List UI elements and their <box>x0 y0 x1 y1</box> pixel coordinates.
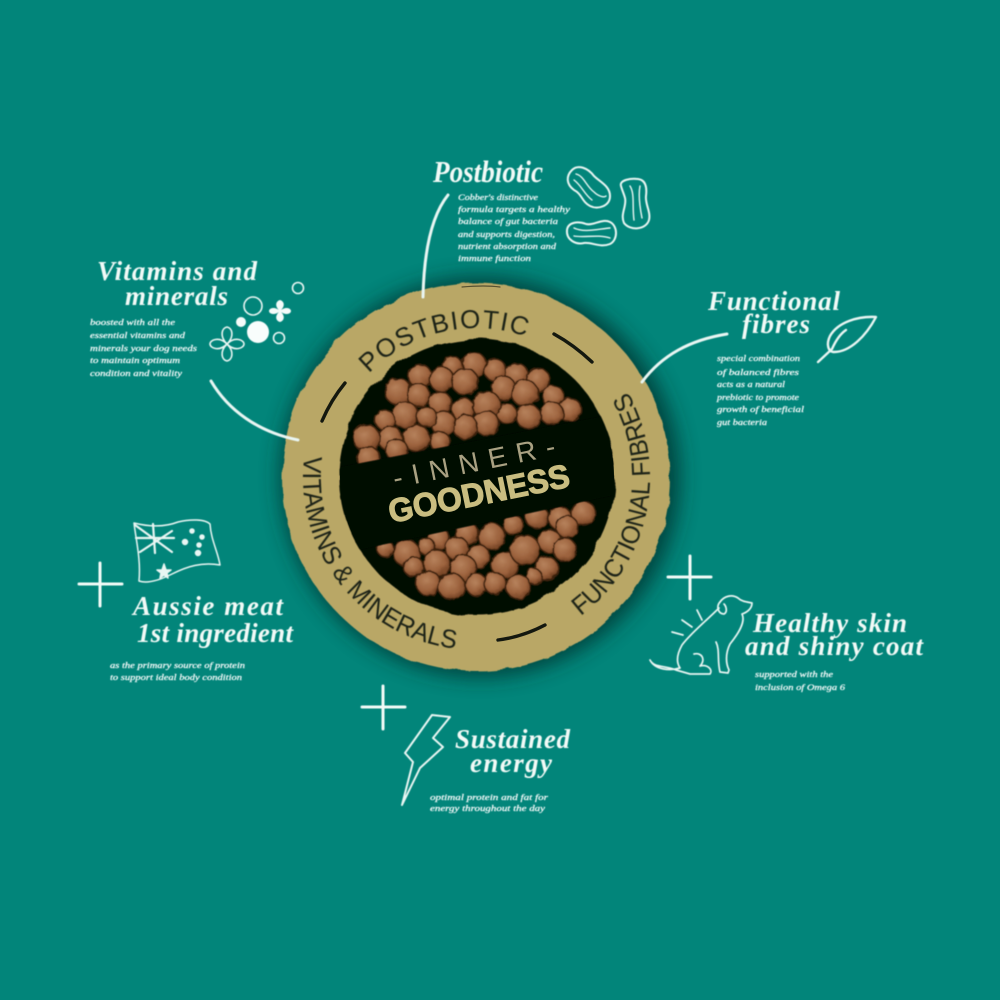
text: fibres description <box>716 354 805 427</box>
ring label: postbiotic: POSTBIOTIC <box>358 309 530 372</box>
heading: healthy skin and shiny coat <box>745 608 924 661</box>
text: skin description: inclusion of Omega 6 <box>755 683 845 692</box>
ring dashes <box>322 286 592 640</box>
text: postbiotic description: formula targets a healthy <box>458 205 571 214</box>
heading: aussie meat <box>131 591 294 648</box>
banner text: inner: -INNER- <box>390 431 558 494</box>
text: aussie description <box>110 661 245 682</box>
heading: aussie meat: Aussie meat <box>131 591 284 621</box>
text: aussie description: as the primary source of protein <box>110 661 245 670</box>
badge: inner goodness <box>269 266 691 688</box>
infographic canvas <box>76 160 924 814</box>
text: fibres description: prebiotic to promote <box>716 393 800 402</box>
text: postbiotic description: and supports digestion, <box>458 230 555 239</box>
ring label: functional fibres: FUNCTIONAL FIBRES <box>570 393 651 616</box>
connector: postbiotic <box>423 195 448 297</box>
plus sign: energy <box>362 686 405 729</box>
text: fibres description: special combination <box>717 354 800 363</box>
heading: sustained energy: energy <box>470 748 553 778</box>
heading: functional fibres <box>707 286 840 339</box>
heading: sustained energy <box>455 724 570 778</box>
text: energy description <box>430 793 549 813</box>
text: vitamins description: to maintain optimum <box>90 356 180 365</box>
heading: healthy skin and shiny coat: Healthy skin <box>752 608 907 638</box>
text: fibres description: acts as a natural <box>717 380 786 389</box>
text: vitamins description: minerals your dog needs <box>90 344 197 353</box>
ring label: vitamins and minerals: VITAMINS & MINERALS <box>302 456 457 649</box>
section: functional fibres <box>642 286 876 427</box>
text: postbiotic description: immune function <box>458 254 531 263</box>
heading: vitamins and minerals: minerals <box>125 281 228 311</box>
section: vitamins and minerals <box>90 256 304 440</box>
text: energy description: optimal protein and fat for <box>430 793 549 802</box>
banner text: goodness: GOODNESS <box>385 457 573 530</box>
text: postbiotic description: Cobber's distinctive <box>458 193 539 202</box>
plus sign: aussie <box>79 563 122 606</box>
icon: lightning bolt <box>402 715 450 805</box>
text: postbiotic description: balance of gut bacteria <box>458 217 558 226</box>
text: postbiotic description <box>458 193 571 263</box>
connector: fibres <box>642 334 727 382</box>
text: vitamins description: essential vitamins and <box>90 331 186 340</box>
heading: sustained energy: Sustained <box>455 724 570 754</box>
icon: australian flag <box>134 520 220 582</box>
text: skin description: supported with the <box>755 670 834 679</box>
text: vitamins description: boosted with all the <box>90 318 176 327</box>
icon: dog <box>650 596 752 674</box>
connector: vitamins <box>211 381 298 440</box>
text: skin description <box>755 670 845 692</box>
text: fibres description: of balanced fibres <box>717 368 799 377</box>
text: fibres description: growth of beneficial <box>717 405 805 414</box>
heading: vitamins and minerals <box>97 256 258 311</box>
icon: vitamins bubbles <box>210 282 304 361</box>
heading: vitamins and minerals: Vitamins and <box>97 256 258 286</box>
heading: healthy skin and shiny coat: and shiny coat <box>745 631 924 661</box>
text: fibres description: gut bacteria <box>717 418 767 427</box>
plus sign: skin <box>668 556 711 599</box>
gold ring <box>282 283 670 671</box>
section: aussie meat <box>79 520 294 682</box>
kibble pile <box>330 352 628 600</box>
text: energy description: energy throughout the day <box>430 804 546 813</box>
section: healthy skin <box>650 556 924 692</box>
heading: aussie meat: 1st ingredient <box>137 618 294 648</box>
text: vitamins description: condition and vitality <box>90 369 183 378</box>
heading: functional fibres: Functional <box>707 286 840 316</box>
icon: leaf <box>818 317 876 362</box>
text: postbiotic description: nutrient absorption and <box>458 242 557 251</box>
heading: functional fibres: fibres <box>742 309 810 339</box>
black banner <box>340 421 614 546</box>
text: vitamins description <box>90 318 197 378</box>
heading: postbiotic: Postbiotic <box>432 154 543 189</box>
badge shadow <box>280 277 680 677</box>
black centre <box>339 339 615 615</box>
section: postbiotic <box>423 154 649 297</box>
section: sustained energy <box>362 686 570 813</box>
icon: bacteria <box>567 167 649 245</box>
text: aussie description: to support ideal body condition <box>110 673 242 682</box>
